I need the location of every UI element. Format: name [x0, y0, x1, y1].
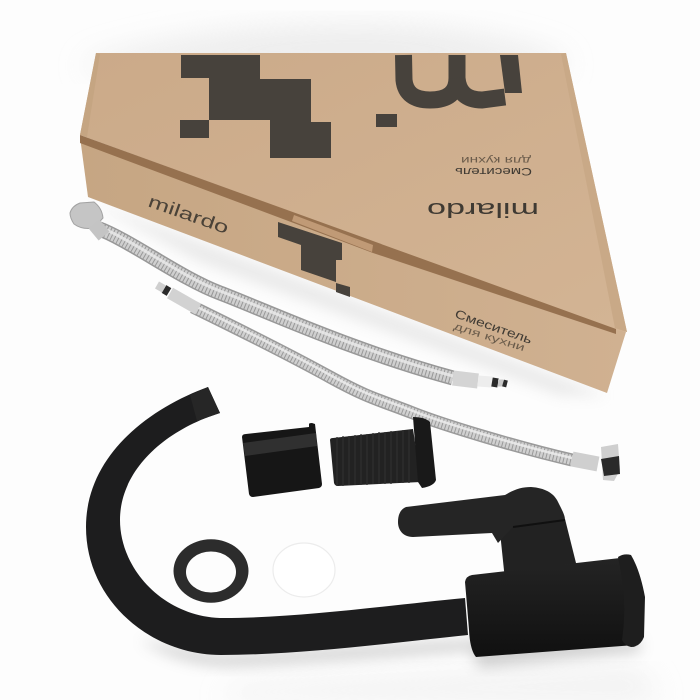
handle seam: [513, 520, 565, 527]
front pixel logo: [278, 222, 350, 297]
shank flange: [413, 417, 436, 488]
short hose tip: [157, 285, 164, 289]
hose braid: [97, 226, 453, 378]
lever handle: [398, 487, 565, 543]
curved spout: [86, 387, 468, 655]
front product subtitle: для кухни: [452, 320, 526, 354]
lid product name: Смеситель: [455, 165, 532, 177]
short hose braid: [193, 305, 572, 460]
spout tip: [190, 387, 220, 421]
lid brand text: milardo: [427, 198, 539, 220]
box front side: [80, 137, 626, 393]
black mounting nut: [242, 423, 322, 497]
faucet: [86, 387, 645, 657]
threaded shank: [330, 417, 436, 488]
lid pixel logo: [180, 55, 331, 158]
lid product subtitle: для кухни: [461, 154, 531, 165]
short braided hose: [157, 285, 620, 481]
rubber washer: [174, 539, 248, 603]
short hose collar: [572, 459, 598, 464]
front product name: Смеситель: [453, 307, 534, 347]
nut highlight: [243, 433, 317, 456]
stem: [500, 519, 577, 580]
body cylinder: [465, 558, 635, 657]
box lid: [80, 53, 627, 332]
short hose o-ring: [164, 289, 169, 292]
end flange: [618, 554, 645, 647]
long braided hose: [70, 202, 507, 384]
lid shadow band: [80, 135, 616, 334]
lid left flap: [80, 53, 100, 137]
hose collar: [94, 224, 104, 236]
lid right flap: [561, 53, 627, 332]
shank thread: [330, 429, 421, 486]
hose end fitting: [453, 378, 507, 384]
tape strip: [292, 215, 373, 252]
lid logo dot: [376, 114, 397, 127]
lid logo letter m: [404, 55, 522, 100]
clear washer: [273, 543, 335, 597]
short hose end fitting: [170, 293, 198, 309]
hose nut: [70, 202, 103, 228]
nut shell: [242, 423, 322, 497]
cardboard box: [80, 53, 627, 393]
front brand text: milardo: [146, 191, 232, 238]
short hose nut: [601, 444, 620, 481]
